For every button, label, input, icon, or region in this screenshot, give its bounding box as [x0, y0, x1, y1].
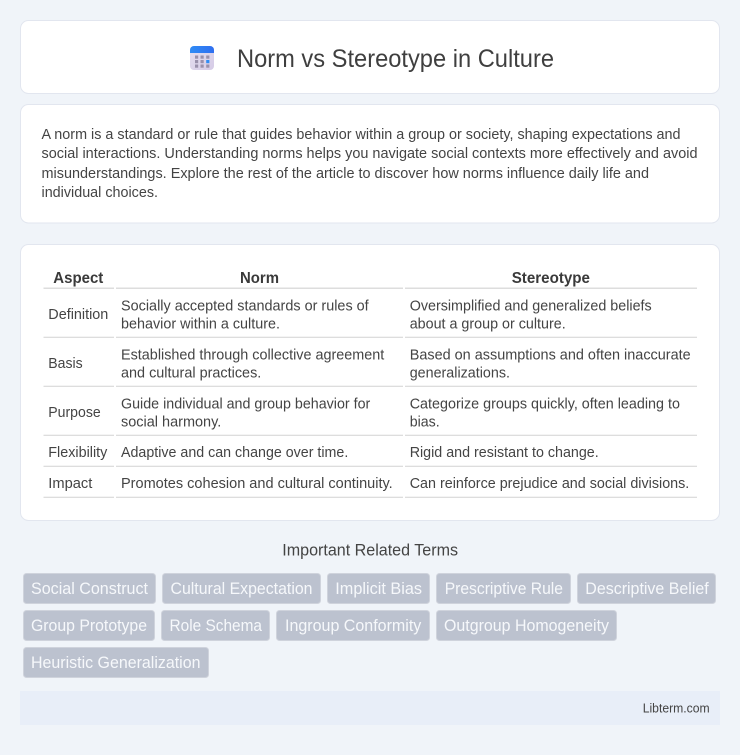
- table header row: Aspect: [53, 270, 103, 287]
- panel: title header: [20, 20, 720, 94]
- tag: heuristic generalization: Heuristic Generalization: [31, 654, 200, 672]
- table row: definition: about a group or culture.: [410, 316, 566, 332]
- tag: ingroup conformity: Ingroup Conformity: [285, 617, 422, 635]
- tag: descriptive belief: [578, 574, 716, 604]
- table header row: Stereotype: [512, 270, 590, 287]
- text block: introduction paragraph: social interactions. Understanding norms helps you navigate social contexts more effectively and avoid: [42, 146, 698, 162]
- table row: purpose: Purpose: [48, 405, 101, 421]
- table row: purpose: social harmony.: [121, 414, 221, 430]
- table row: impact: Promotes cohesion and cultural continuity.: [121, 476, 393, 492]
- tag: cultural expectation: Cultural Expectation: [170, 580, 312, 598]
- tag: role schema: Role Schema: [170, 617, 263, 635]
- table row: basis: and cultural practices.: [121, 366, 261, 382]
- tag: group prototype: [24, 610, 154, 640]
- table row: purpose: [44, 396, 697, 436]
- table header row: [44, 270, 697, 289]
- tag: social construct: [24, 574, 156, 604]
- table row: flexibility: Rigid and resistant to change.: [410, 445, 599, 461]
- tag list: related terms: [24, 574, 716, 678]
- tag: prescriptive rule: [436, 574, 570, 604]
- table row: definition: behavior within a culture.: [121, 316, 280, 332]
- table row: flexibility: Flexibility: [48, 445, 108, 461]
- table row: impact: Can reinforce prejudice and social divisions.: [410, 476, 689, 492]
- table row: definition: Definition: [48, 307, 108, 323]
- table row: basis: generalizations.: [410, 366, 510, 382]
- tag: descriptive belief: Descriptive Belief: [585, 580, 709, 598]
- table row: flexibility: [44, 445, 697, 467]
- footer: [20, 691, 720, 725]
- table row: purpose: Categorize groups quickly, often leading to: [410, 396, 680, 412]
- table row: definition: [44, 298, 697, 338]
- tag: implicit bias: [328, 574, 430, 604]
- tag: implicit bias: Implicit Bias: [335, 580, 422, 598]
- panel: introduction: [20, 104, 720, 223]
- title: Norm vs Stereotype in Culture: [237, 45, 554, 73]
- table row: impact: Impact: [48, 476, 92, 492]
- text block: introduction paragraph: [42, 127, 698, 201]
- text block: introduction paragraph: A norm is a standard or rule that guides behavior within a group or society, shaping expectations and: [42, 127, 680, 143]
- table row: impact: [44, 476, 697, 498]
- tag: role schema: [162, 610, 270, 640]
- heading: important related terms: Important Related Terms: [282, 542, 458, 560]
- table header row: Norm: [240, 270, 279, 287]
- icon: calendar: [190, 46, 214, 70]
- table row: purpose: Guide individual and group behavior for: [121, 396, 370, 412]
- table row: purpose: bias.: [410, 414, 440, 430]
- tag: outgroup homogeneity: Outgroup Homogeneity: [444, 617, 610, 635]
- table row: basis: Based on assumptions and often inaccurate: [410, 348, 691, 364]
- panel: comparison table: [20, 244, 720, 520]
- text block: introduction paragraph: misunderstandings. Explore the rest of the article to discover how norms influence daily life and: [42, 166, 649, 182]
- tag: prescriptive rule: Prescriptive Rule: [445, 580, 563, 598]
- table row: definition: Socially accepted standards or rules of: [121, 298, 370, 314]
- tag: heuristic generalization: [24, 648, 208, 678]
- table row: basis: Basis: [48, 356, 83, 372]
- tag: outgroup homogeneity: [436, 610, 616, 640]
- tag: ingroup conformity: [276, 610, 430, 640]
- footer credit: Libterm.com: [643, 700, 710, 715]
- text block: introduction paragraph: individual choices.: [42, 185, 158, 201]
- table row: definition: Oversimplified and generalized beliefs: [410, 298, 652, 314]
- tag: cultural expectation: [162, 574, 320, 604]
- tag: group prototype: Group Prototype: [31, 617, 147, 635]
- table row: basis: Established through collective agreement: [121, 348, 384, 364]
- tag: social construct: Social Construct: [31, 580, 148, 598]
- table row: basis: [44, 348, 697, 387]
- table row: flexibility: Adaptive and can change over time.: [121, 445, 348, 461]
